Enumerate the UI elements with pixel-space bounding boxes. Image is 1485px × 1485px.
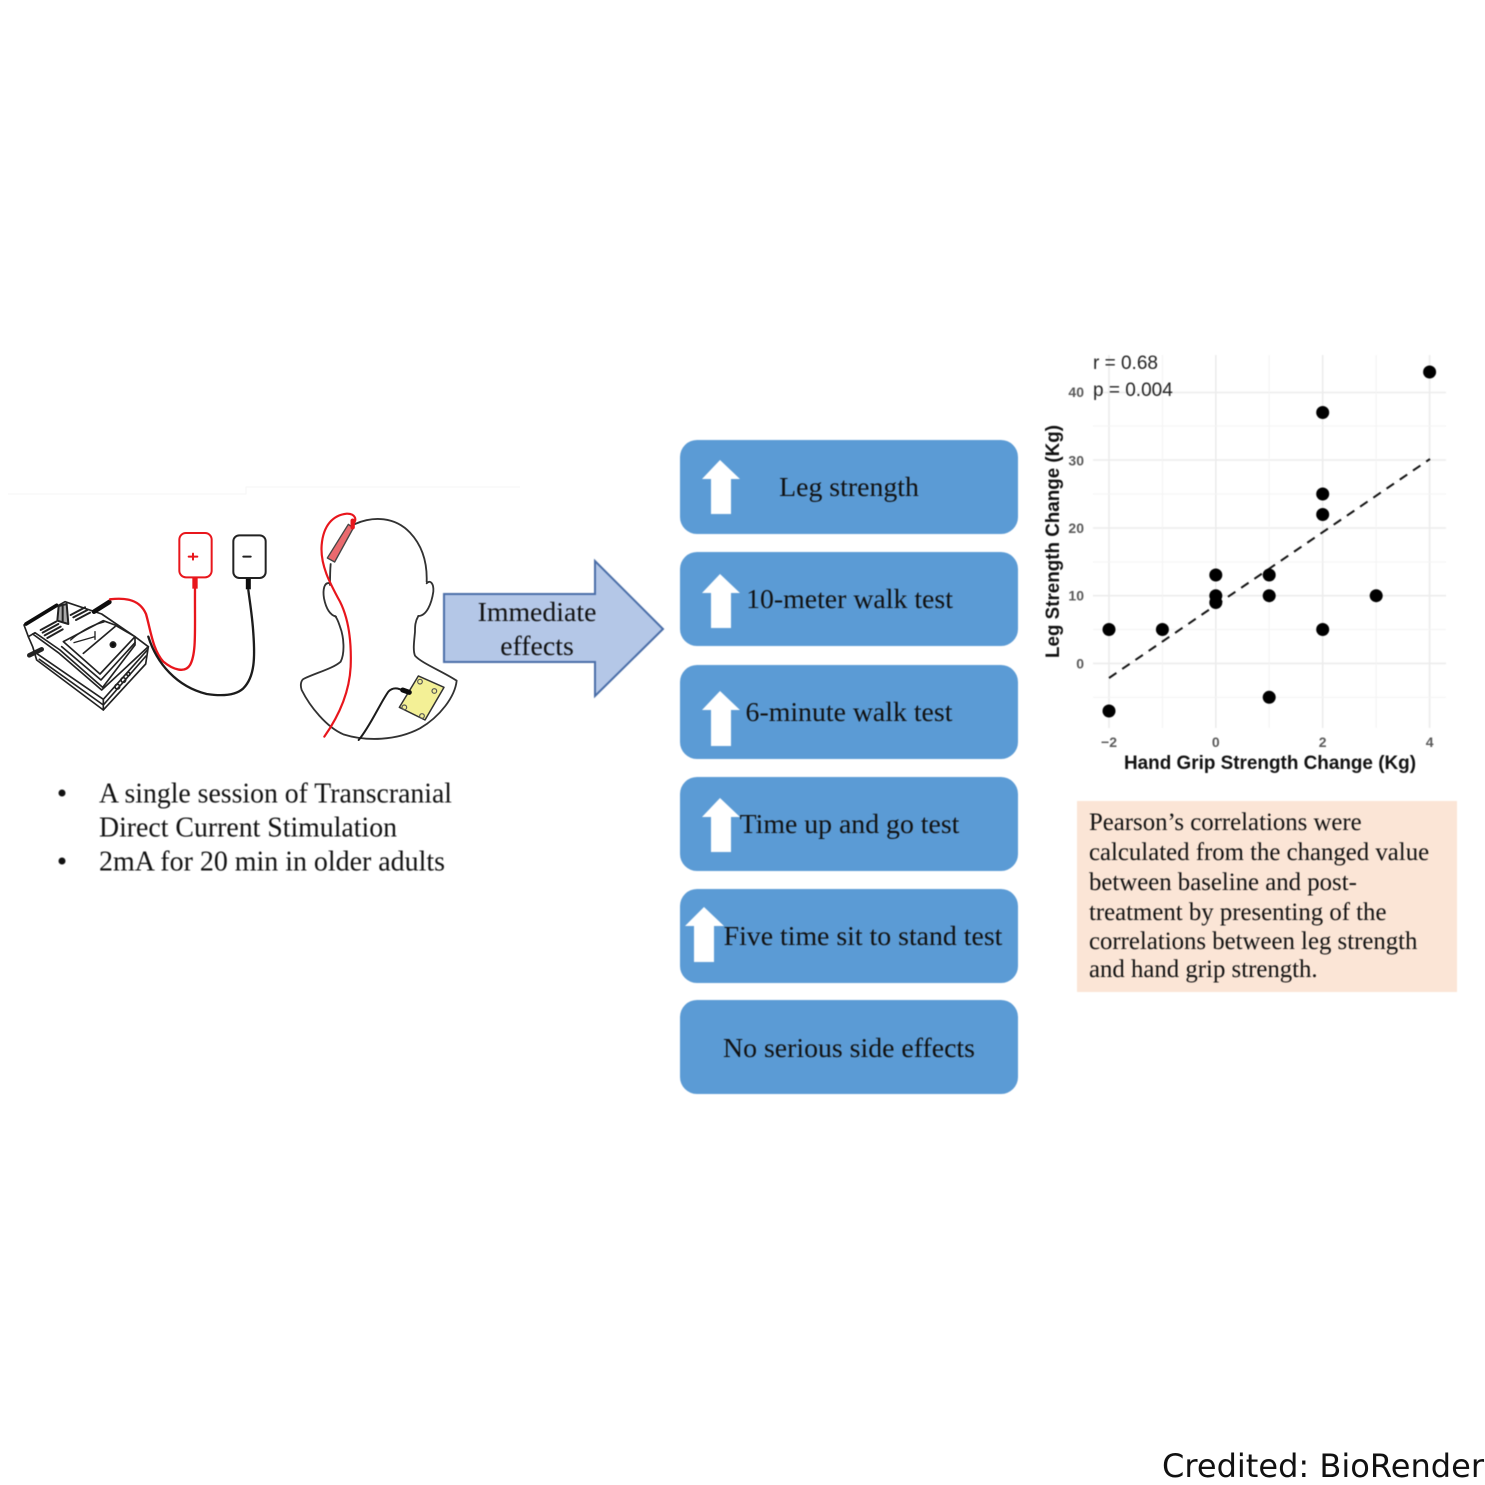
x axis ticks: 4 <box>1426 734 1434 750</box>
x axis ticks: 0 <box>1212 734 1220 750</box>
axis titles: Hand Grip Strength Change (Kg) <box>1124 753 1416 774</box>
data points <box>1102 366 1436 718</box>
outcome card: leg strength <box>680 440 1018 534</box>
x axis ticks: 2 <box>1319 734 1327 750</box>
axis titles <box>1043 425 1416 774</box>
text block: protocol bullets <box>58 778 452 878</box>
text block: protocol bullets: 2mA for 20 min in older adults <box>99 846 445 878</box>
credit: Credited: BioRender <box>1162 1447 1485 1485</box>
outcome card: 6-minute walk test <box>680 665 1018 759</box>
outcome card: 10-meter walk test: 10-meter walk test <box>746 584 953 615</box>
y axis ticks: 30 <box>1068 452 1084 468</box>
correlation statistics <box>1093 353 1173 401</box>
correlation statistics: r = 0.68 <box>1093 353 1158 374</box>
text block: protocol bullets: Direct Current Stimulation <box>99 812 397 844</box>
icon: stimulator device <box>24 602 148 710</box>
outcome card: five time sit to stand test <box>680 889 1018 983</box>
arrow: immediate effects <box>444 561 663 696</box>
outcome card: no serious side effects <box>680 1000 1018 1094</box>
outcome card: five time sit to stand test: Five time sit to stand test <box>724 921 1003 952</box>
y axis ticks: 0 <box>1076 656 1084 672</box>
outcome card: time up and go test: Time up and go test <box>740 809 960 840</box>
scatter plot: leg strength vs hand grip strength <box>1043 353 1446 774</box>
note panel: Pearson's correlations <box>1077 801 1457 992</box>
arrow: immediate effects: effects <box>500 631 574 662</box>
y axis ticks: 10 <box>1068 588 1084 604</box>
outcome card: 10-meter walk test <box>680 552 1018 646</box>
axis titles: Leg Strength Change (Kg) <box>1043 425 1064 658</box>
text block: protocol bullets: A single session of Transcranial <box>99 778 452 810</box>
x axis ticks <box>1101 734 1434 750</box>
note panel: Pearson's correlations: calculated from the changed value <box>1089 839 1429 866</box>
outcome card: 6-minute walk test: 6-minute walk test <box>746 697 953 728</box>
y axis ticks: 40 <box>1068 384 1084 400</box>
correlation statistics: p = 0.004 <box>1093 380 1173 401</box>
trend line <box>1109 459 1430 678</box>
illustration: tDCS device and electrodes <box>24 514 457 740</box>
x axis ticks: −2 <box>1101 734 1117 750</box>
y axis ticks: 20 <box>1068 520 1084 536</box>
y axis ticks <box>1068 384 1084 672</box>
icon: head and shoulders with electrode placement <box>301 514 457 740</box>
outcome card: leg strength: Leg strength <box>779 472 919 503</box>
arrow: immediate effects: Immediate <box>478 597 596 628</box>
icon: black electrode <box>148 535 266 695</box>
note panel: Pearson's correlations: treatment by presenting of the <box>1089 899 1386 926</box>
note panel: Pearson's correlations: Pearson’s correlations were <box>1089 809 1362 836</box>
note panel: Pearson's correlations: and hand grip strength. <box>1089 956 1318 983</box>
icon: red electrode <box>110 533 212 670</box>
note panel: Pearson's correlations: correlations between leg strength <box>1089 928 1418 955</box>
note panel: Pearson's correlations: between baseline and post- <box>1089 869 1357 896</box>
outcome card: time up and go test <box>680 777 1018 871</box>
outcome card: no serious side effects: No serious side effects <box>723 1033 975 1064</box>
